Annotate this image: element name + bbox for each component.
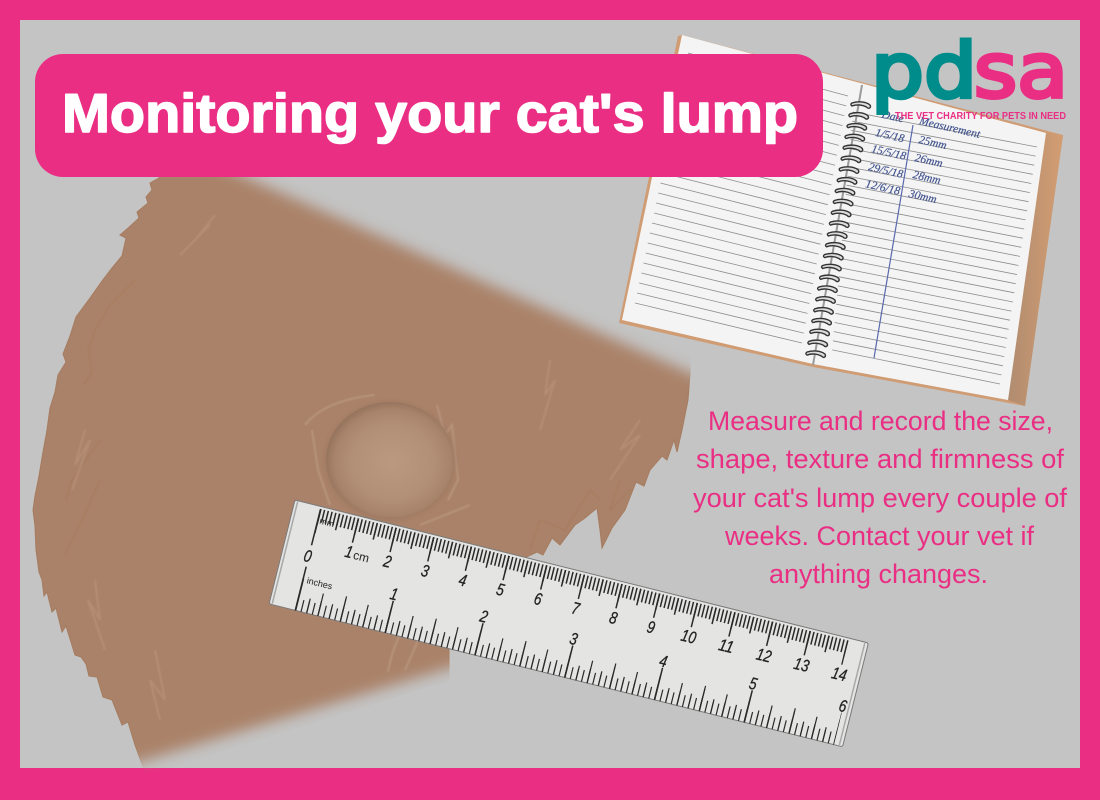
ruler labels: mm xyxy=(319,516,336,529)
ruler labels: 1 xyxy=(343,542,355,562)
handwritten measurements: 1/5/18 xyxy=(874,127,906,145)
advice text xyxy=(693,406,1067,589)
spine line xyxy=(813,85,862,365)
ruler labels: cm xyxy=(352,548,371,565)
notebook cover xyxy=(619,35,1063,406)
handwritten measurements: 26mm xyxy=(914,152,944,170)
ruler labels: 3 xyxy=(419,561,431,581)
inch scale ticks xyxy=(295,567,845,745)
strands around the lump xyxy=(305,395,470,672)
fur strands, light xyxy=(72,215,640,720)
ruler labels: 14 xyxy=(830,663,849,685)
ruler labels: 2 xyxy=(477,606,490,627)
illustration: cat fur with lump xyxy=(33,140,690,775)
ruler labels: 1 xyxy=(388,584,400,604)
handwritten measurements: 25mm xyxy=(918,134,948,152)
ruler labels: 6 xyxy=(837,696,849,716)
handwritten measurements: 28mm xyxy=(912,169,942,187)
handwritten measurements: Date xyxy=(879,108,905,125)
ruler labels: 10 xyxy=(679,626,699,648)
ruler labels: 5 xyxy=(747,674,759,694)
ruler labels: 13 xyxy=(792,654,812,676)
ruler labels: 9 xyxy=(645,617,657,638)
advice text: Measure and record the size, xyxy=(708,406,1053,436)
ruler labels xyxy=(297,514,861,719)
spiral binding xyxy=(806,102,870,357)
logo tagline: THE VET CHARITY FOR PETS IN NEED xyxy=(895,110,1066,122)
ruler labels: 4 xyxy=(657,651,669,672)
title text: Monitoring your cat's lump xyxy=(62,82,798,144)
ruler labels: 2 xyxy=(381,551,394,572)
ruler labels: inches xyxy=(306,575,334,592)
notebook pages xyxy=(622,35,1046,400)
ruler labels: 6 xyxy=(532,589,544,609)
handwritten measurements: 29/5/18 xyxy=(867,161,904,181)
ruler labels: 3 xyxy=(568,629,580,649)
centimetre scale ticks xyxy=(311,509,848,677)
title banner xyxy=(35,54,823,177)
advice text: shape, texture and firmness of xyxy=(696,444,1064,474)
ruler labels: 5 xyxy=(494,580,507,600)
ruler labels: 12 xyxy=(754,645,774,667)
advice text: weeks. Contact your vet if xyxy=(724,521,1034,551)
handwritten measurements xyxy=(864,108,982,206)
logo letters: pd xyxy=(871,26,977,115)
ruler labels: 8 xyxy=(607,608,620,628)
handwritten measurements: 30mm xyxy=(907,188,938,206)
ruler body xyxy=(269,500,868,747)
left page rules xyxy=(635,53,848,343)
fur strands, dark xyxy=(590,490,612,509)
ruler xyxy=(269,500,868,747)
ruler labels: 0 xyxy=(302,546,314,566)
ruler labels: 4 xyxy=(457,570,469,591)
ruler labels: 11 xyxy=(717,635,736,657)
notebook with measurement record xyxy=(619,35,1063,406)
PDSA logo: sa xyxy=(974,26,1068,115)
lump xyxy=(324,401,456,521)
column line xyxy=(874,125,913,358)
handwritten measurements: Measurement xyxy=(917,115,982,141)
PDSA logo xyxy=(871,26,1068,122)
handwritten measurements: 12/6/18 xyxy=(864,178,901,198)
handwritten measurements: 15/5/18 xyxy=(870,143,907,163)
right page rules xyxy=(832,112,1037,384)
ruler labels: 7 xyxy=(570,598,582,619)
advice text: your cat's lump every couple of xyxy=(693,483,1067,513)
advice text: anything changes. xyxy=(769,559,988,589)
